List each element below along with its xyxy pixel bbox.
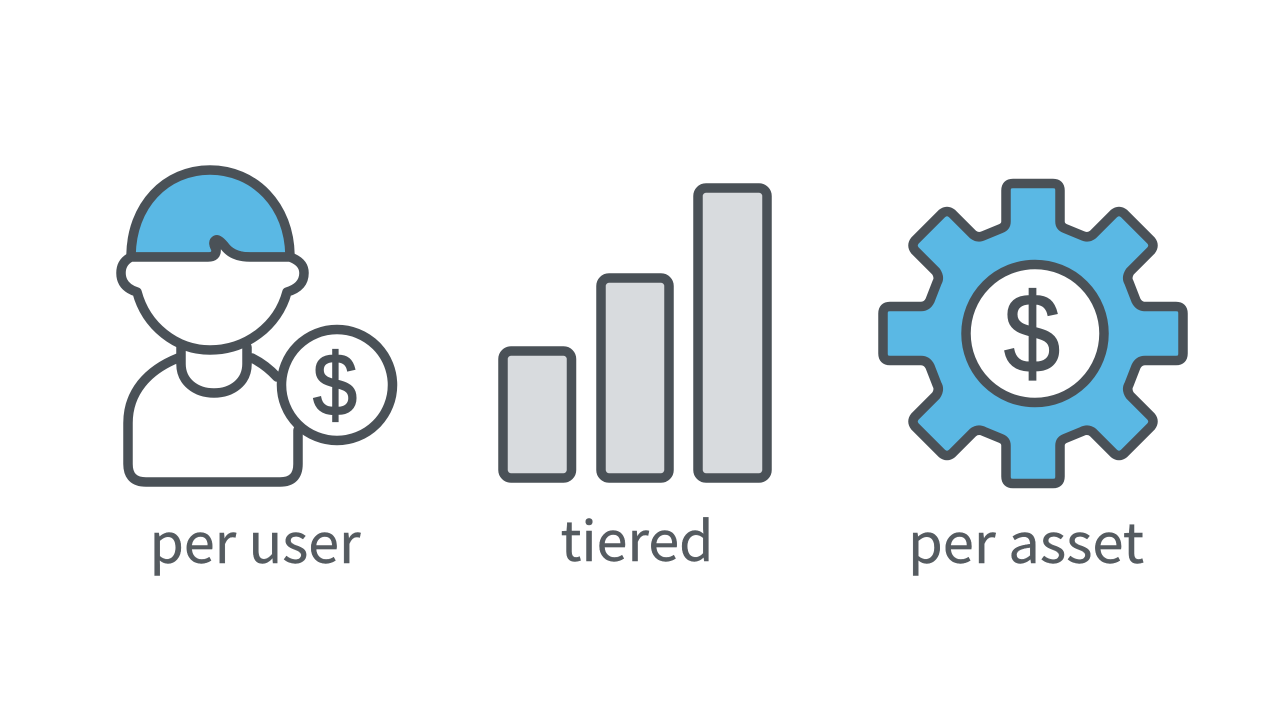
tall bar — [698, 188, 767, 478]
label: per user: per user — [150, 499, 361, 579]
user body — [128, 347, 298, 482]
label: per asset: per asset — [908, 499, 1144, 579]
user head — [121, 240, 304, 350]
user hair — [131, 170, 290, 257]
icon: user with dollar coin — [121, 170, 392, 482]
icon: tiered bars — [503, 188, 767, 478]
middle bar — [601, 278, 669, 478]
icon: gear with dollar — [883, 184, 1183, 484]
gear outline — [883, 184, 1183, 484]
user collar — [181, 347, 247, 393]
short bar — [503, 351, 572, 478]
gear centre — [966, 264, 1104, 402]
dollar coin — [282, 330, 392, 440]
user coin dollar sign: $ — [313, 335, 357, 434]
label: tiered: tiered — [560, 497, 714, 577]
user body outline — [128, 358, 298, 482]
gear dollar sign: $ — [1004, 271, 1060, 396]
